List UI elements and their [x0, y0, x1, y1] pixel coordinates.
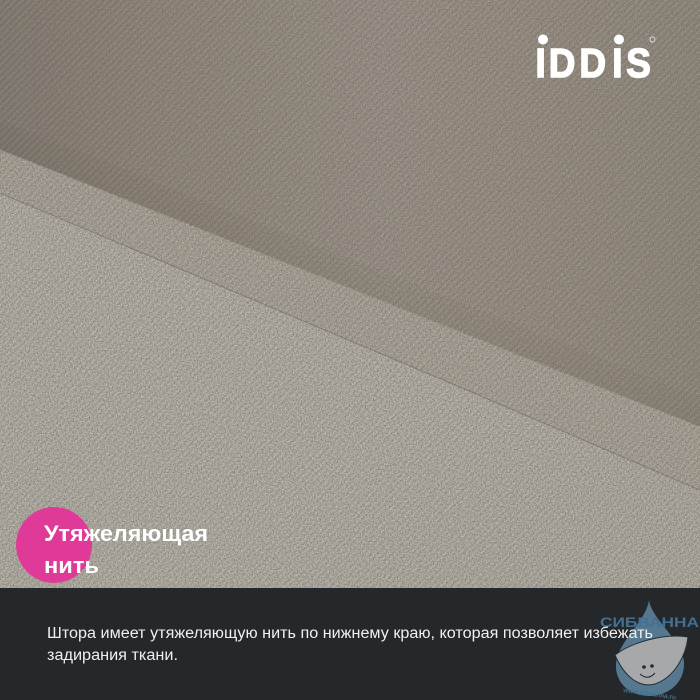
description text: Штора имеет утяжеляющую нить по нижнему краю, которая позволяет избежать — [47, 625, 653, 642]
face — [642, 665, 646, 669]
dark caption band — [0, 588, 700, 700]
watermark: Sibvanna drop and bathtub — [600, 600, 699, 700]
heading: weighted thread: Утяжеляющая — [44, 521, 208, 546]
brand name: СИБВАННА — [600, 614, 699, 630]
description text: задирания ткани. — [47, 647, 178, 664]
pink circle badge — [16, 507, 92, 583]
upper curtain panel — [0, 0, 700, 430]
folded hem — [0, 150, 700, 490]
drop — [616, 600, 684, 696]
heading: weighted thread: нить — [44, 553, 99, 578]
description text — [47, 625, 653, 664]
heading: weighted thread — [44, 521, 208, 578]
lower curtain panel — [0, 150, 700, 590]
logo: IDDIS: IDDIS — [535, 41, 651, 86]
bathtub — [615, 636, 688, 685]
hem seam — [0, 193, 700, 490]
